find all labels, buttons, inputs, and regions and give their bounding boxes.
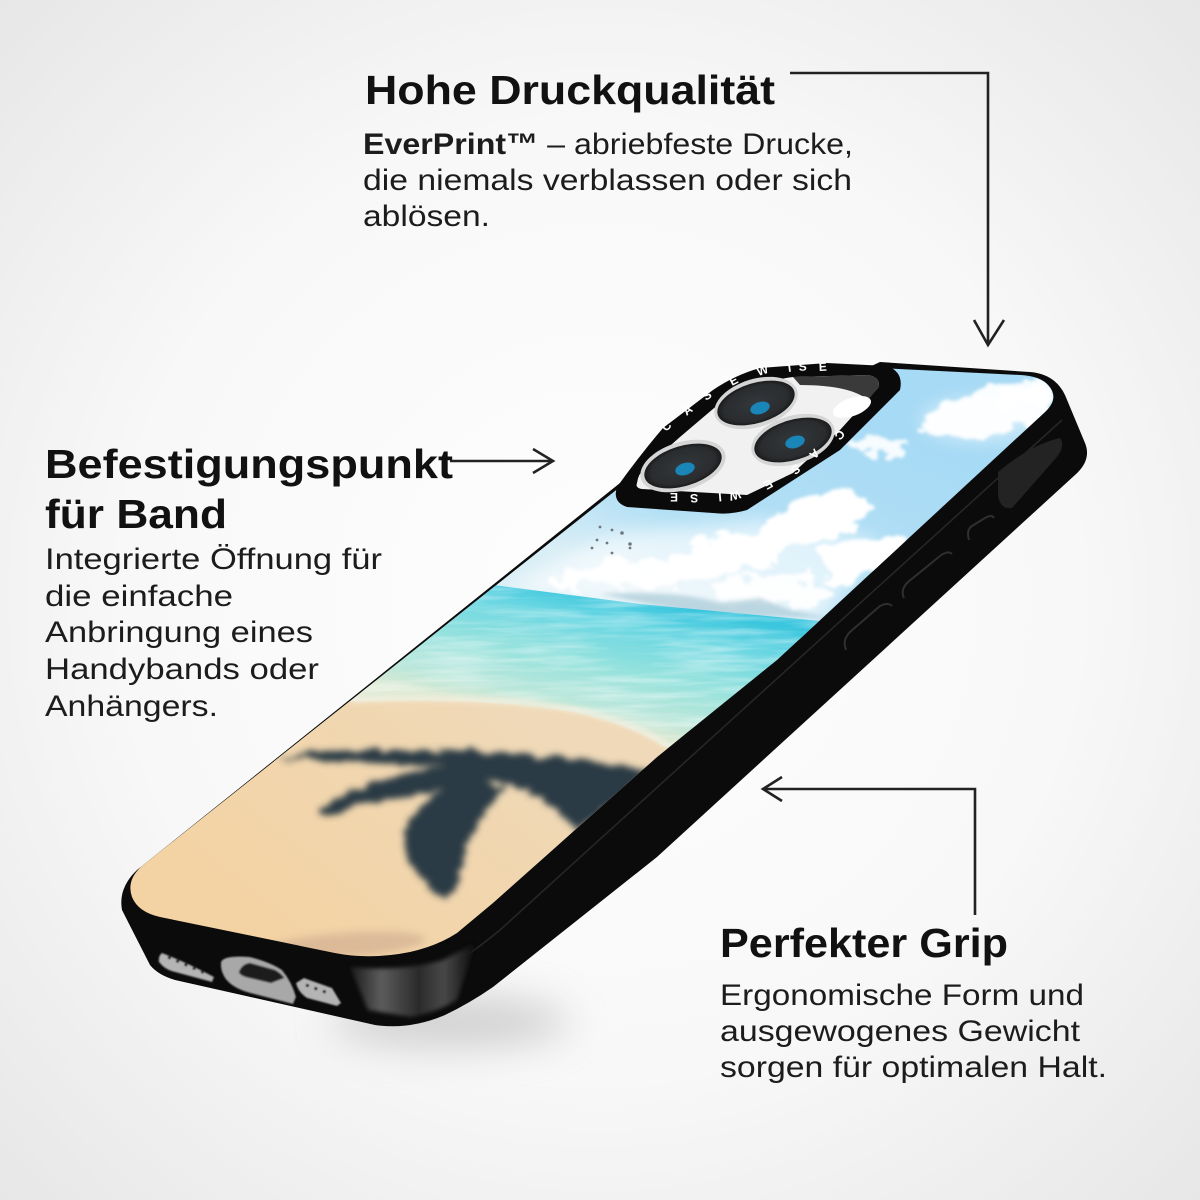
body: sorgen für optimalen Halt. (720, 1051, 1107, 1084)
flash (830, 392, 874, 422)
heading: für Band (45, 491, 227, 537)
body: ablösen. (363, 200, 490, 233)
pale cloud haze (500, 398, 1040, 620)
heading: Perfekter Grip (720, 920, 1008, 966)
phone case (100, 340, 1100, 1026)
sea (274, 585, 819, 769)
foam (350, 698, 668, 746)
lens left (634, 430, 732, 502)
body: ausgewogenes Gewicht (720, 1015, 1081, 1048)
body: Integrierte Öffnung für (45, 543, 382, 576)
strap attachment (998, 438, 1062, 508)
brand text top: CASEWISE (659, 359, 827, 434)
text block: strap attachment (45, 441, 453, 723)
arrow: print quality (790, 73, 1004, 345)
body: die niemals verblassen oder sich (363, 164, 852, 197)
window inner shade (793, 375, 879, 400)
clouds (554, 378, 1055, 604)
body (45, 543, 382, 723)
lens top (708, 367, 804, 439)
lens right (745, 404, 841, 476)
heading: Hohe Druckqualität (365, 67, 775, 113)
bottom speaker left (159, 953, 214, 982)
body: EverPrint™ – abriebfeste Drucke, (363, 128, 853, 161)
camera ring (616, 359, 901, 514)
brand text bottom: CASEWISE (670, 427, 848, 505)
text block: grip (720, 920, 1107, 1084)
case body (121, 362, 1087, 1026)
side buttons (845, 516, 994, 650)
artwork: beach print (130, 364, 1054, 956)
arrow: grip (763, 777, 975, 915)
dry grass blur (280, 930, 424, 956)
heading (45, 441, 453, 537)
body (363, 128, 853, 233)
distant mountains (600, 593, 830, 618)
body: Handybands oder (45, 653, 319, 686)
sand (100, 700, 670, 960)
body: Ergonomische Form und (720, 979, 1084, 1012)
body (720, 979, 1107, 1084)
heading: Befestigungspunkt (45, 441, 453, 487)
body: Anbringung eines (45, 616, 313, 649)
bottom speaker right (296, 978, 341, 1006)
birds (591, 526, 632, 554)
wave texture (299, 586, 819, 756)
sky (427, 368, 1054, 640)
text block: print quality (363, 67, 853, 233)
side ridge (440, 420, 1062, 972)
body: die einfache (45, 580, 233, 613)
palm shadow (280, 748, 650, 900)
bottom charging port (221, 957, 296, 1004)
arrow: strap attachment (450, 449, 553, 473)
camera window (637, 375, 879, 495)
body: Anhängers. (45, 690, 218, 723)
phone drop shadow (330, 996, 570, 1048)
corner gloss (350, 943, 475, 1017)
